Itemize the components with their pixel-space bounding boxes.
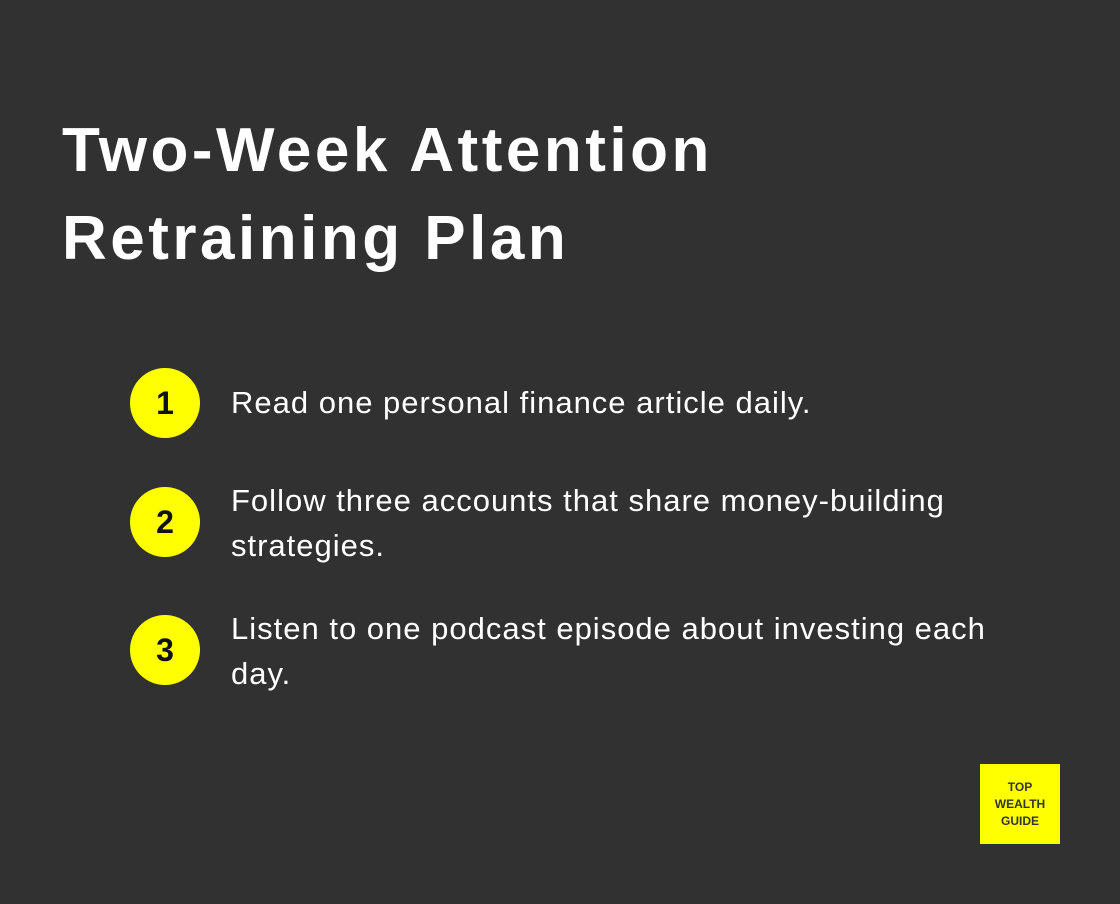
- icon: number 3: 3: [156, 632, 174, 668]
- logo: GUIDE: [1001, 814, 1039, 828]
- logo: WEALTH: [995, 796, 1045, 810]
- icon: number 3: [130, 615, 200, 685]
- icon: number 1: [130, 368, 200, 438]
- logo: [980, 764, 1060, 844]
- title: [62, 116, 713, 273]
- logo: TOP: [1008, 780, 1032, 794]
- title: Two-Week Attention: [62, 116, 713, 185]
- step 2: [130, 483, 945, 563]
- step 3: [130, 611, 986, 691]
- step 1: [130, 368, 812, 438]
- icon: number 1: 1: [156, 385, 174, 421]
- icon: number 2: [130, 487, 200, 557]
- title: Retraining Plan: [62, 204, 569, 273]
- text: step 2: Follow three accounts that share money-building strategies.: [231, 483, 945, 563]
- text: step 1: Read one personal finance article daily.: [231, 385, 812, 420]
- text: step 3: Listen to one podcast episode about investing each day.: [231, 611, 986, 691]
- icon: number 2: 2: [156, 504, 174, 540]
